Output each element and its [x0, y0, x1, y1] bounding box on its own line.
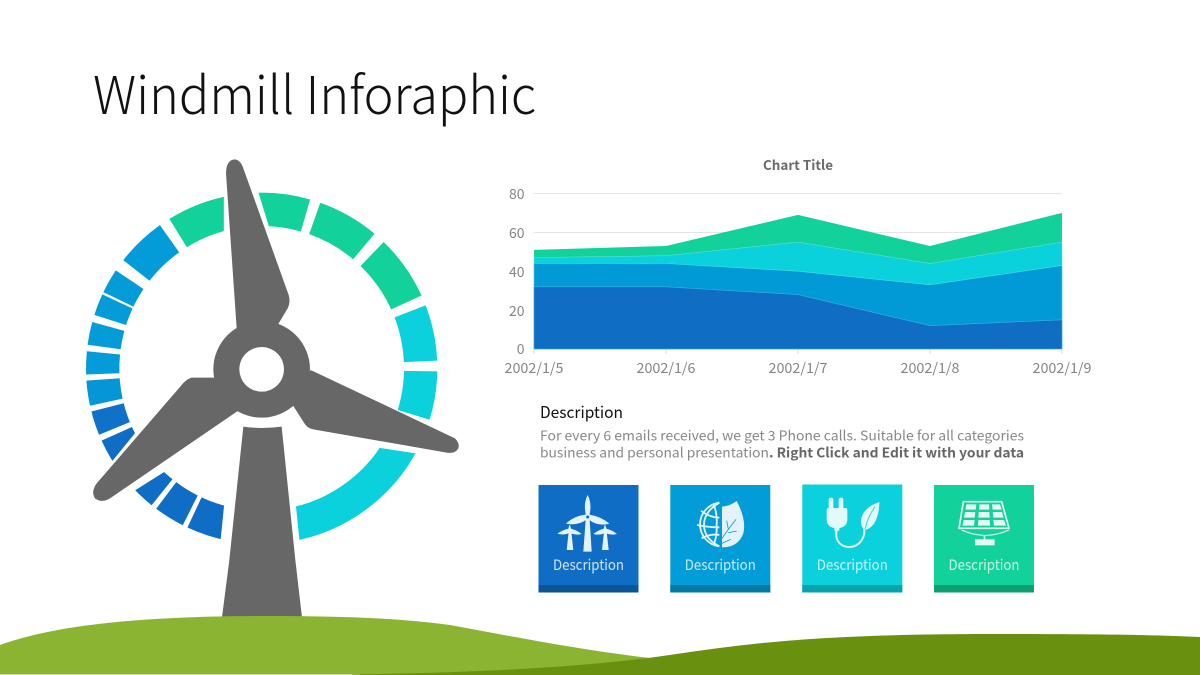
- dark green hill: [352, 634, 1200, 675]
- title: Windmill Inforaphic: [93, 54, 536, 129]
- description body line 1: For every 6 emails received, we get 3 Phone calls. Suitable for all categories: [540, 424, 1024, 444]
- light green hill: [0, 616, 650, 675]
- x axis: [534, 349, 1062, 354]
- segmented ring: [37, 144, 486, 593]
- y axis labels: 0: [517, 339, 525, 359]
- y axis labels: 80: [509, 184, 525, 204]
- tile label: Description: [817, 554, 888, 575]
- series: dark blue: [534, 287, 1062, 349]
- tile label: Description: [685, 554, 756, 575]
- tile label: Description: [553, 554, 624, 575]
- icon: wind turbines: [557, 495, 617, 552]
- description heading: Description: [540, 399, 623, 423]
- tile: wind: [538, 485, 638, 592]
- x axis labels: [504, 358, 1092, 378]
- series: blue: [534, 264, 1062, 349]
- area chart: [504, 154, 1092, 378]
- rotor blades and hub: [93, 159, 459, 501]
- series: green: [534, 213, 1062, 349]
- chart title: Chart Title: [763, 154, 833, 174]
- x axis labels: 2002/1/8: [900, 358, 960, 378]
- windmill graphic: [37, 144, 486, 617]
- icon: globe leaf: [697, 501, 744, 547]
- hills: [0, 616, 1200, 675]
- tile label: Description: [948, 554, 1020, 575]
- y axis labels: 40: [509, 262, 525, 282]
- tile: plug and leaf: [802, 484, 902, 592]
- icon: solar panel: [959, 502, 1009, 545]
- tile: solar panel: [934, 485, 1034, 592]
- x axis labels: 2002/1/9: [1032, 358, 1092, 378]
- y axis labels: 60: [509, 223, 525, 243]
- x axis labels: 2002/1/5: [504, 358, 564, 378]
- icon: plug leaf: [827, 498, 879, 547]
- tower: [222, 427, 302, 617]
- description block: [540, 399, 1024, 462]
- tile: globe and leaf: [670, 485, 770, 592]
- x axis labels: 2002/1/7: [768, 358, 828, 378]
- series: cyan: [534, 242, 1062, 349]
- y axis labels: 20: [509, 301, 525, 321]
- y axis labels: [509, 184, 525, 359]
- description body line 2: business and personal presentation . Right Click and Edit it with your data: [540, 442, 1024, 462]
- x axis labels: 2002/1/6: [636, 358, 696, 378]
